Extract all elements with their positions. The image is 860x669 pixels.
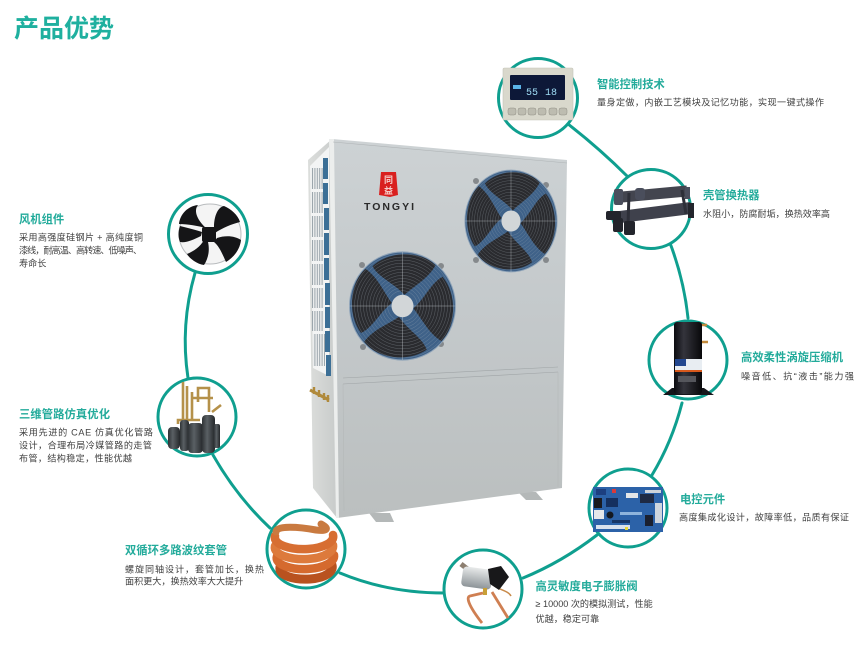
- heading: 双循环多路波纹套管: [125, 543, 227, 557]
- feature: intelligent control: [498, 58, 824, 138]
- description: ≥ 10000 次的模拟测试，性能: [536, 598, 653, 609]
- heat pump unit: [308, 139, 567, 522]
- icon: piping and tanks: [168, 382, 221, 453]
- description: 面积更大，换热效率大大提升: [125, 576, 243, 586]
- feature: scroll compressor: [649, 321, 854, 399]
- description: 设计，合理布局冷媒管路的走管: [19, 440, 152, 450]
- description: 高度集成化设计，故障率低，品质有保证: [679, 512, 849, 522]
- ring: [267, 510, 345, 588]
- heading: 高灵敏度电子膨胀阀: [536, 579, 638, 593]
- ring: [612, 170, 690, 248]
- heading: 风机组件: [19, 212, 64, 226]
- large fan: [349, 252, 456, 362]
- description: 量身定做，内嵌工艺模块及记忆功能，实现一键式操作: [597, 96, 824, 108]
- feature: 3D piping optimisation: [19, 378, 236, 464]
- side panel: [308, 139, 337, 518]
- icon: expansion valve: [461, 564, 511, 623]
- description: 采用先进的 CAE 仿真优化管路: [19, 426, 153, 438]
- feature: fan assembly: [19, 194, 248, 274]
- icon: shell and tube exchanger: [606, 187, 694, 235]
- description: 采用高强度硅钢片 + 高纯度铜: [19, 232, 143, 242]
- icon: control panel: 55: [526, 88, 538, 99]
- connecting arc: [185, 124, 688, 593]
- description: 优越，稳定可靠: [536, 613, 599, 624]
- description: 漆线，耐高温、高转速、低噪声、: [19, 244, 142, 256]
- front panel: [332, 139, 567, 518]
- water connectors: [310, 387, 329, 402]
- feature: electric control: [589, 469, 849, 547]
- icon: circuit board: [593, 487, 663, 532]
- icon: copper coil: [275, 524, 334, 579]
- ring: [589, 469, 667, 547]
- feature: electronic expansion valve: [444, 550, 653, 628]
- side grille: [310, 147, 331, 376]
- logo: TONGYI: [364, 201, 414, 213]
- small fan: [465, 170, 557, 273]
- heading: 三维管路仿真优化: [19, 407, 110, 421]
- logo: 益: [384, 185, 393, 196]
- ring: [498, 58, 578, 138]
- lower panel seams: [343, 367, 558, 384]
- description: 水阻小，防腐耐垢，换热效率高: [703, 208, 830, 219]
- icon: control panel: 18: [545, 88, 557, 99]
- ring: [158, 378, 236, 456]
- ring: [649, 321, 727, 399]
- description: 噪音低、抗“液击”能力强: [741, 370, 854, 382]
- description: 寿命长: [19, 258, 46, 268]
- feature: shell and tube exchanger: [606, 170, 830, 248]
- title: 产品优势: [14, 15, 114, 43]
- ring: [444, 550, 522, 628]
- icon: compressor: [663, 322, 714, 395]
- heading: 电控元件: [680, 492, 725, 506]
- logo: [364, 172, 414, 213]
- description: 螺旋同轴设计，套管加长，换热: [125, 564, 264, 574]
- icon: control panel: [503, 68, 573, 120]
- heading: 壳管换热器: [703, 188, 760, 202]
- heading: 高效柔性涡旋压缩机: [741, 350, 844, 364]
- feature: corrugated coaxial tube: [125, 510, 345, 588]
- description: 布管，结构稳定，性能优越: [19, 452, 132, 464]
- icon: axial fan: [178, 204, 241, 265]
- logo: 同: [384, 175, 393, 185]
- ring: [168, 194, 248, 274]
- feet: [369, 492, 543, 522]
- heading: 智能控制技术: [597, 77, 665, 91]
